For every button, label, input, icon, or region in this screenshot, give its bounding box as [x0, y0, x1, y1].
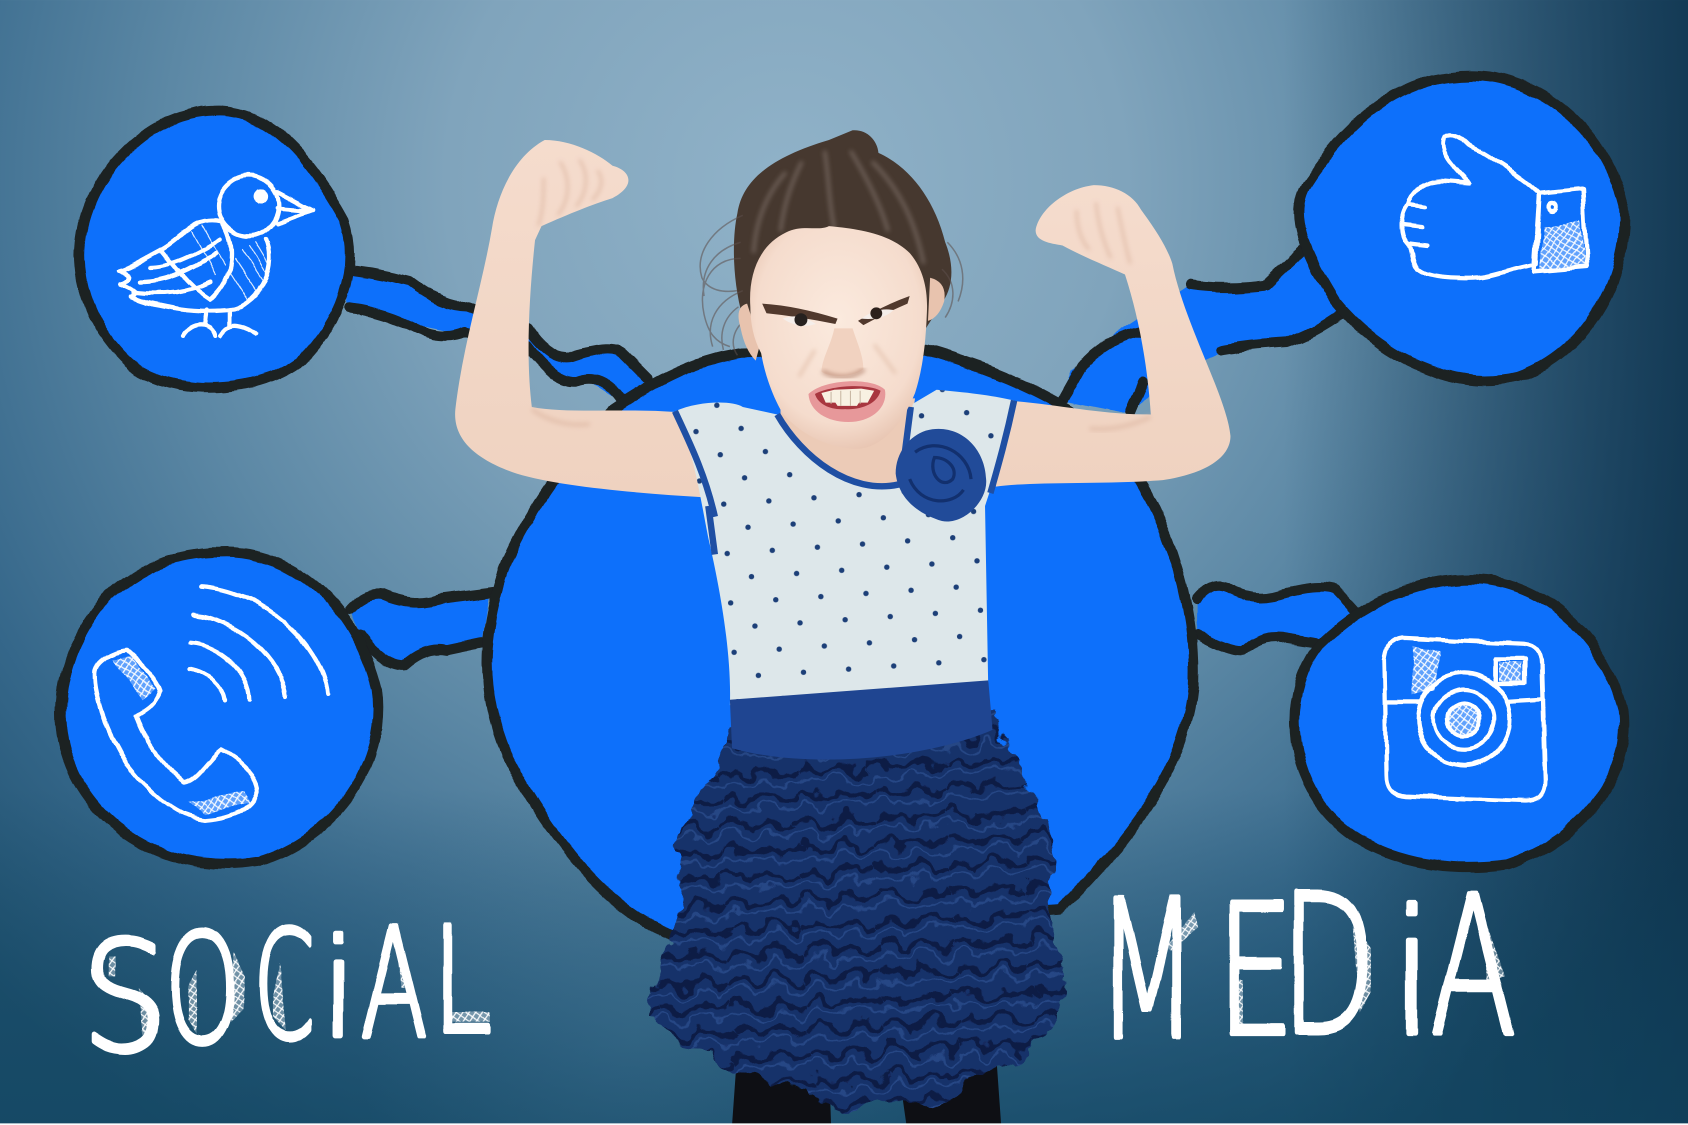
title word: MEDiA: E	[1216, 866, 1294, 1077]
title word: MEDiA: i	[1391, 874, 1434, 1074]
face	[750, 226, 927, 449]
right arm	[996, 185, 1230, 487]
bubble: bird	[80, 111, 350, 388]
eyebrows	[762, 296, 910, 325]
nose	[821, 328, 863, 376]
title word: SOCiAL: A	[361, 897, 428, 1072]
icon: camera	[1384, 638, 1545, 801]
bubble: thumbs up	[1299, 75, 1624, 381]
arm shadow	[532, 409, 1151, 429]
flower brooch	[896, 429, 986, 522]
eyes	[783, 309, 894, 326]
title word: SOCiAL: S	[82, 910, 168, 1085]
mouth	[808, 381, 885, 422]
connector: thumb to centre	[1060, 250, 1344, 414]
letter shading: SOCiAL	[109, 946, 490, 1035]
central blue circle	[487, 350, 1193, 934]
neck	[780, 398, 915, 486]
icon: phone and signal	[95, 587, 327, 820]
fist creases	[538, 159, 1130, 264]
connector: phone to centre	[350, 592, 493, 667]
title word: SOCiAL: C	[254, 900, 315, 1074]
skirt	[646, 711, 1063, 1114]
icon: thumbs up	[1402, 135, 1587, 278]
title word: SOCiAL: O	[165, 903, 241, 1078]
hand-drawn network of bubbles	[61, 75, 1624, 934]
title word: SOCiAL: i	[322, 912, 356, 1068]
title word: MEDiA: M	[1096, 859, 1198, 1082]
waistband	[730, 680, 993, 760]
ears	[738, 278, 945, 361]
left arm	[455, 140, 705, 497]
letter shading: MEDiA	[1165, 912, 1505, 1030]
connector: bird to centre	[347, 269, 651, 400]
bubble: phone	[61, 552, 378, 864]
title word: MEDiA: A	[1430, 856, 1516, 1080]
legs	[732, 1050, 1001, 1125]
girl flexing	[455, 130, 1230, 1125]
title word: MEDiA	[1096, 854, 1516, 1082]
shirt	[675, 390, 1014, 705]
bubble: camera	[1295, 579, 1624, 867]
hair	[700, 130, 963, 355]
icon: bird	[118, 175, 312, 336]
title word: MEDiA: D	[1281, 854, 1376, 1077]
title word: SOCiAL: L	[433, 897, 491, 1067]
bottom edge	[0, 1123, 1688, 1125]
flyaway hair	[700, 215, 963, 355]
title word: SOCiAL	[82, 897, 491, 1085]
connector: camera to centre	[1197, 585, 1359, 653]
